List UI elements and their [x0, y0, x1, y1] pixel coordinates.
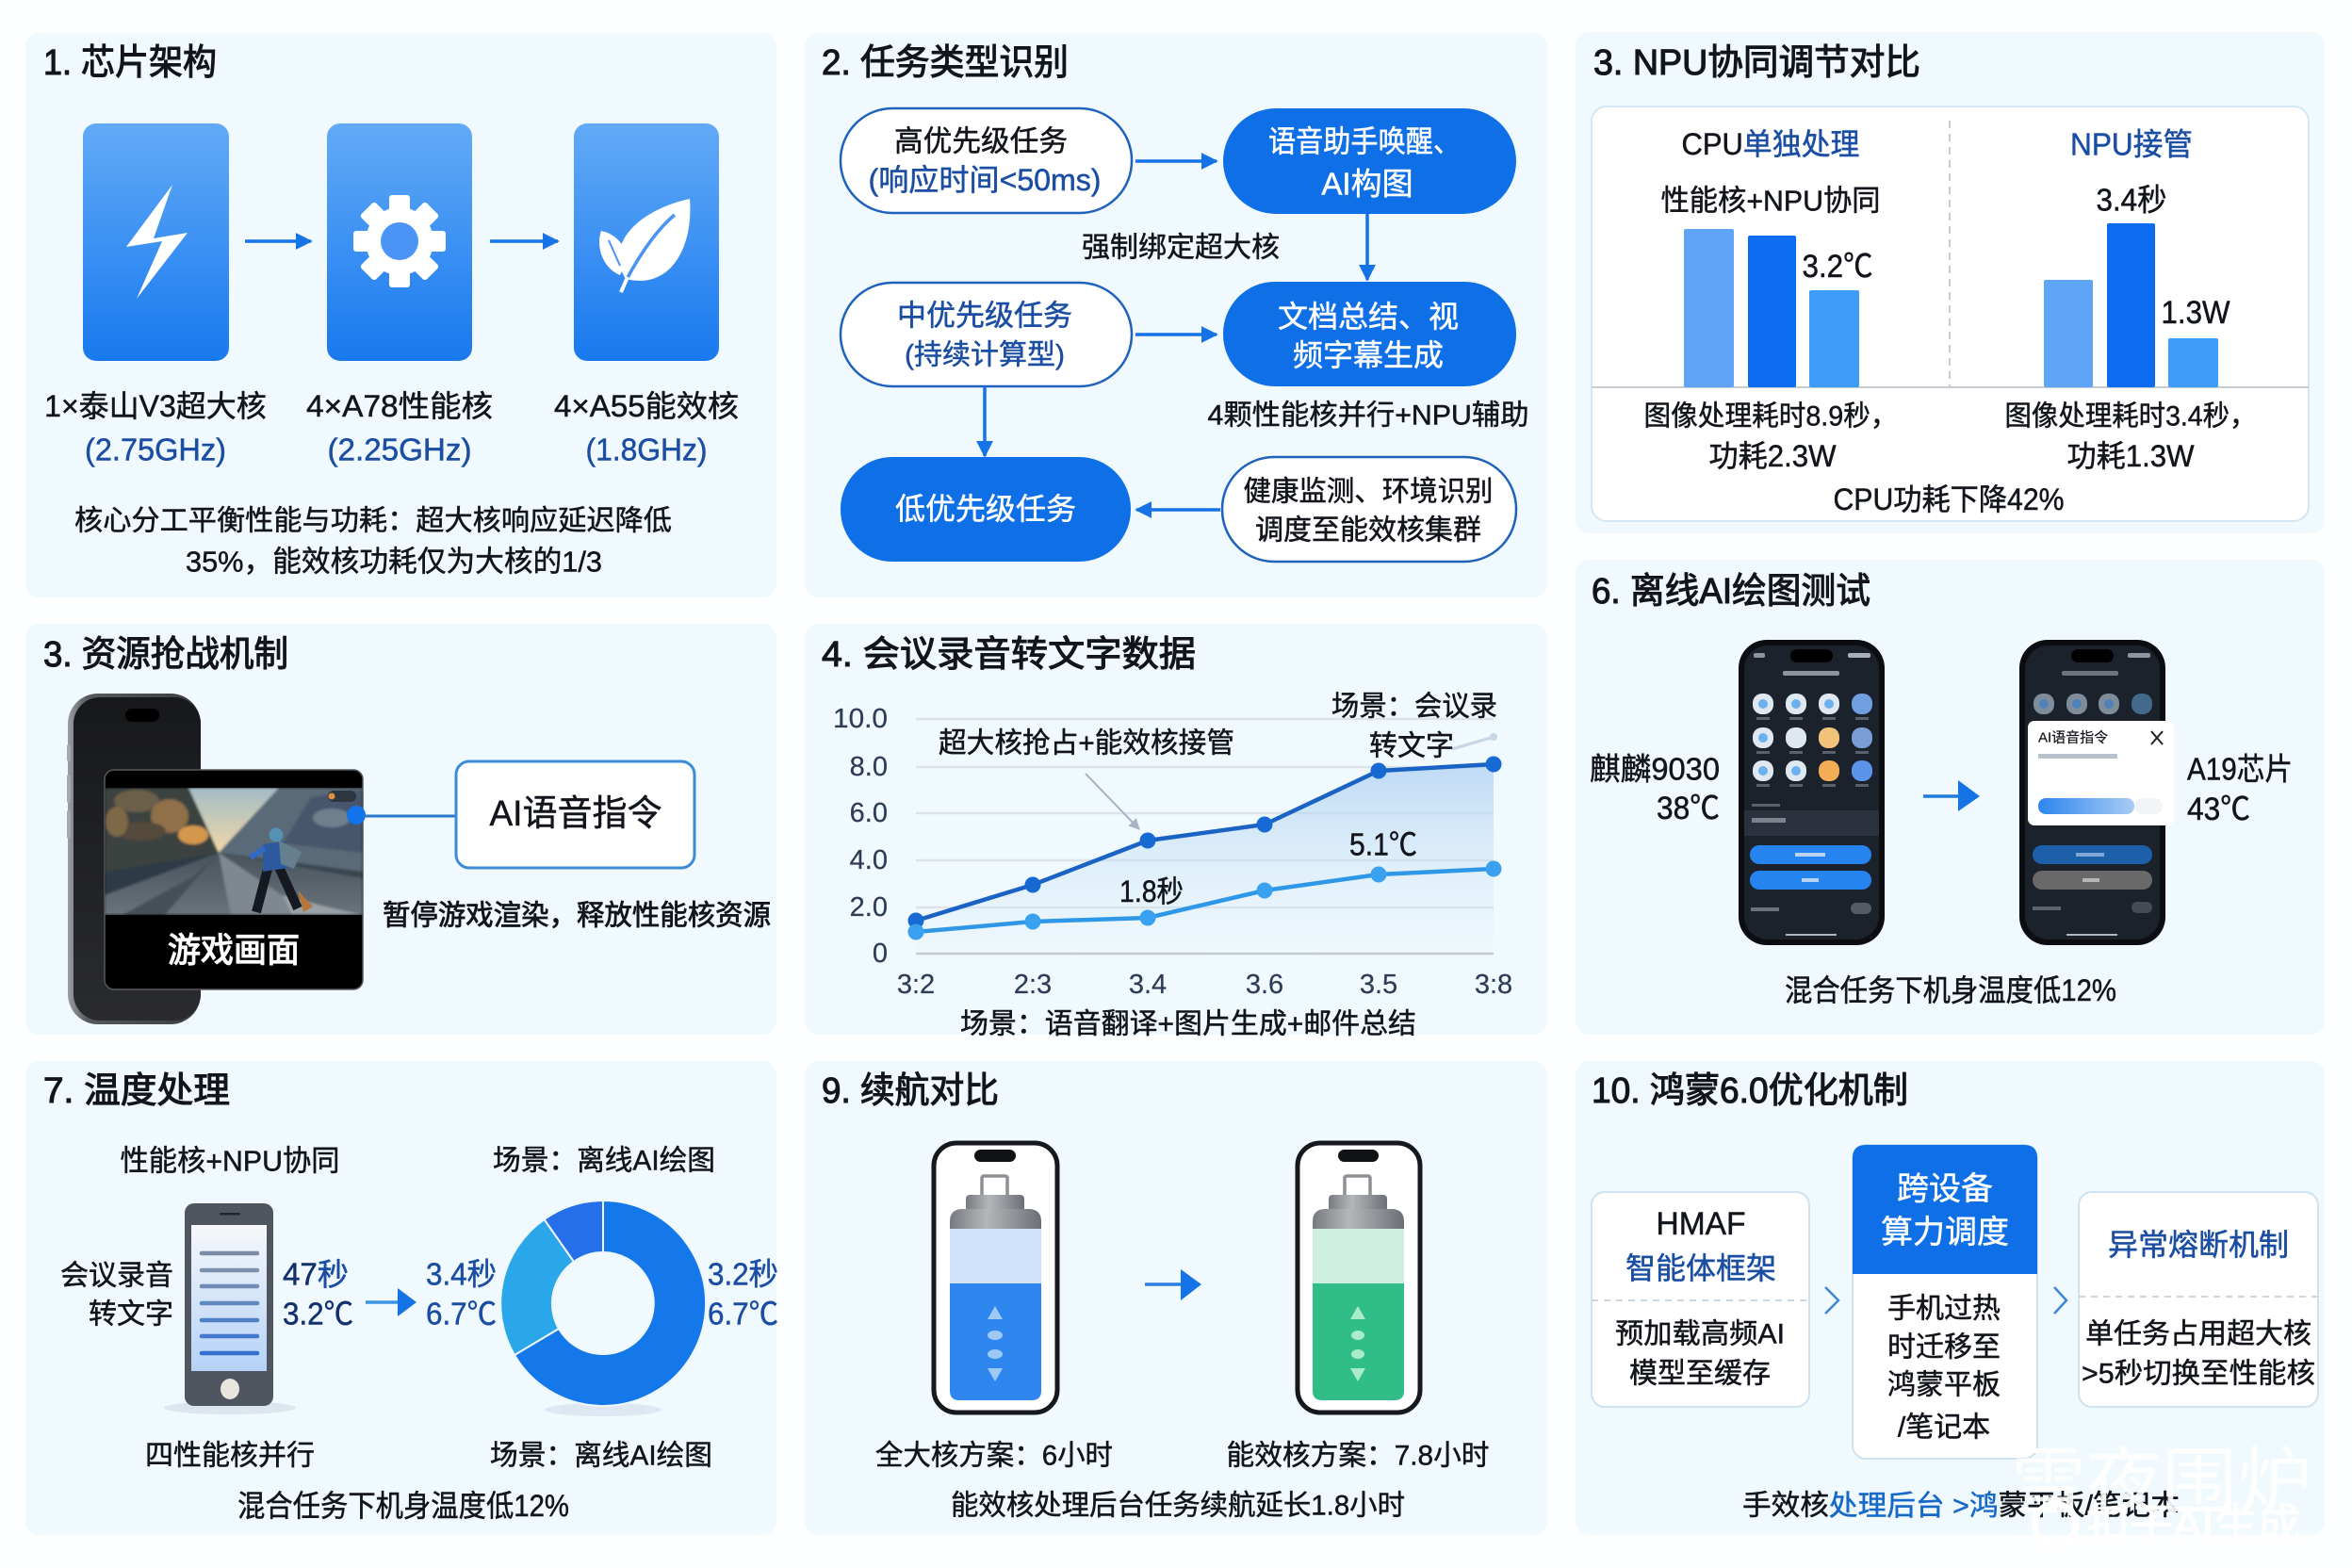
pill: high priority: (响应时间<50ms) [869, 163, 1101, 197]
pill: document summary: 文档总结、视 [1278, 300, 1459, 334]
y axis labels: 10.0 [833, 704, 888, 734]
card: fuse: 异常熔断机制 [2108, 1228, 2289, 1262]
heading: CPU only: CPU单独处理 [1681, 127, 1860, 161]
pill: high priority: 高优先级任务 [894, 124, 1068, 158]
donut chart [500, 1200, 706, 1416]
dark series [908, 756, 1502, 929]
card: HMAF: 模型至缓存 [1629, 1359, 1771, 1389]
line chart [833, 692, 1512, 1000]
heading: HarmonyOS optimisation: 10. 鸿蒙6.0优化机制 [1592, 1071, 1908, 1111]
watermark: 扣子AI生成 [2086, 1500, 2300, 1549]
arrow: super to performance [245, 239, 311, 243]
label: scenario top: 场景：离线AI绘图 [493, 1146, 715, 1176]
bars: CPU group [1684, 229, 1859, 387]
text: pause render: 暂停游戏渲染，释放性能核资源 [383, 901, 771, 931]
label: Kirin 9030: 麒麟9030 [1590, 752, 1720, 786]
x axis labels: 2:3 [1014, 970, 1052, 1000]
caption: task migration: 手效核处理后台 >鸿蒙平板/笔记本 [1742, 1491, 2180, 1521]
label: A19 chip [2187, 752, 2293, 827]
x axis labels: 3.5 [1360, 970, 1397, 1000]
text: core division summary: 35%，能效核功耗仅为大核的1/3 [186, 545, 602, 579]
chevron 2 [2054, 1287, 2066, 1314]
label: parallel cores: 4颗性能核并行+NPU辅助 [1208, 400, 1528, 432]
label: efficiency core plan: 能效核方案：7.8小时 [1227, 1440, 1489, 1472]
card: HMAF: 智能体框架 [1625, 1251, 1776, 1285]
pill: low priority: 低优先级任务 [895, 492, 1076, 526]
light series [908, 861, 1502, 940]
label: performance core: 4×A78性能核 [306, 389, 493, 423]
value: 1.3 W: 1.3W [2162, 295, 2230, 331]
text: NPU result: 功耗1.3W [2067, 439, 2195, 473]
phone icon with text lines [164, 1203, 296, 1414]
text: power drop: CPU功耗下降42% [1834, 482, 2064, 516]
watermark: 雪夜围炉 [2011, 1442, 2312, 1525]
arrow: high to voice [1135, 159, 1217, 163]
values: 47 s 3.2 degrees [283, 1257, 353, 1331]
label: efficiency core [554, 389, 739, 467]
value: 3.4 seconds: 3.4秒 [2096, 183, 2167, 217]
value: 1.8 seconds: 1.8秒 [1119, 874, 1184, 908]
phone with game overlay [67, 694, 366, 1024]
card: HMAF: HMAF [1657, 1206, 1745, 1242]
card: fuse: >5秒切换至性能核 [2082, 1359, 2315, 1389]
label: super core [44, 389, 267, 467]
phone: blue battery [934, 1143, 1057, 1413]
arrow: phone compare [1923, 780, 1980, 811]
heading: NPU comparison: 3. NPU协同调节对比 [1593, 43, 1920, 83]
box: AI voice command: AI语音指令 [490, 794, 662, 834]
chevron 1 [1825, 1287, 1838, 1314]
bars: NPU group [2044, 223, 2218, 387]
phone: left app grid [1739, 640, 1885, 945]
label: efficiency core: (1.8GHz) [586, 432, 707, 467]
text: CPU result: 功耗2.3W [1709, 439, 1837, 473]
card: super core with lightning icon [83, 123, 229, 361]
label: scenario bottom: 场景：离线AI绘图 [490, 1440, 712, 1472]
panel: 9. battery life [805, 1061, 1547, 1535]
pill: voice assistant: AI构图 [1321, 166, 1413, 202]
values: left of donut: 6.7℃ [426, 1297, 497, 1331]
text: CPU result: 图像处理耗时8.9秒， [1643, 401, 1898, 432]
x axis labels [897, 970, 1512, 1000]
card: efficiency core with leaf icon [574, 123, 719, 361]
y axis labels: 8.0 [850, 752, 888, 782]
card: fuse [2079, 1192, 2318, 1407]
card: comparison [1592, 106, 2309, 521]
label: all big core plan: 全大核方案：6小时 [875, 1440, 1113, 1472]
faint series [1452, 733, 1497, 749]
card: cross-device [1853, 1145, 2037, 1459]
label: performance core: (2.25GHz) [328, 432, 471, 467]
caption: battery extension: 能效核处理后台任务续航延长1.8小时 [951, 1491, 1405, 1521]
value: 5.1 degrees: 5.1℃ [1349, 827, 1417, 861]
text: CPU result [1643, 401, 1898, 473]
label: A19 chip: A19芯片 [2187, 752, 2293, 786]
x axis labels: 3:2 [897, 970, 935, 1000]
pill: health monitoring: 调度至能效核集群 [1255, 514, 1481, 547]
values: left of donut [426, 1257, 497, 1331]
arrow: voice to docs [1365, 214, 1369, 280]
panel: 4. transcription data [805, 624, 1547, 1040]
panel: 7. temperature [25, 1061, 778, 1535]
game screen [105, 770, 363, 989]
panel: 3. NPU comparison [1576, 32, 2325, 533]
text: NPU result: 图像处理耗时3.4秒， [2005, 401, 2256, 432]
label: super core: (2.75GHz) [85, 432, 226, 467]
label: bind to super core: 强制绑定超大核 [1082, 232, 1280, 264]
arrow: medium to low [983, 386, 987, 456]
x axis labels: 3.4 [1129, 970, 1167, 1000]
panel: 10. HarmonyOS optimisation [1576, 1061, 2325, 1549]
heading: temperature: 7. 温度处理 [43, 1071, 230, 1111]
heading: task type recognition: 2. 任务类型识别 [822, 43, 1069, 83]
pill: medium priority [841, 283, 1132, 386]
values: right of donut: 3.2秒 [708, 1257, 778, 1291]
card: cross-device: 手机过热 [1887, 1293, 2001, 1325]
y axis labels: 4.0 [850, 845, 888, 875]
card: fuse: 单任务占用超大核 [2085, 1319, 2311, 1349]
panel: 1. chip architecture [25, 33, 776, 597]
label: four perf cores: 四性能核并行 [145, 1440, 315, 1472]
values: left of donut: 3.4秒 [426, 1257, 497, 1291]
y axis labels [833, 704, 888, 969]
panel: 2. task type recognition [805, 33, 1547, 597]
caption: scenario: 场景：语音翻译+图片生成+邮件总结 [960, 1008, 1416, 1040]
box: AI voice command [456, 761, 694, 868]
card: cross-device: /笔记本 [1898, 1412, 1990, 1444]
pill: document summary: 频字幕生成 [1293, 338, 1444, 372]
panel: 6. offline AI drawing [1576, 560, 2325, 1035]
label: Kirin 9030: 38℃ [1657, 791, 1720, 826]
card: HMAF [1592, 1192, 1809, 1407]
connector line [364, 814, 456, 818]
pill: high priority [841, 108, 1132, 213]
pill: voice assistant [1223, 108, 1516, 214]
y axis labels: 6.0 [850, 798, 888, 828]
arrow: temp compare [366, 1288, 416, 1316]
arrow: performance to efficiency [490, 239, 558, 243]
label: efficiency core: 4×A55能效核 [554, 389, 739, 423]
pill: health monitoring [1222, 457, 1516, 562]
popup dialog [2028, 721, 2174, 825]
y axis labels: 2.0 [850, 892, 888, 923]
card: performance core with gear icon [327, 123, 472, 361]
y axis labels: 0 [873, 939, 888, 969]
annotation: core takeover: 超大核抢占+能效核接管 [939, 727, 1234, 760]
value: 3.2 degrees: 3.2℃ [1802, 249, 1873, 285]
area fill [916, 764, 1494, 954]
card: cross-device: 鸿蒙平板 [1887, 1370, 2001, 1400]
label: meeting transcription: 转文字 [89, 1298, 173, 1331]
pill: voice assistant: 语音助手唤醒、 [1268, 124, 1461, 158]
pill: health monitoring: 健康监测、环境识别 [1244, 477, 1493, 507]
annotation: scenario: 场景：会议录 [1331, 692, 1497, 722]
caption: temperature: 混合任务下机身温度低12% [1785, 973, 2116, 1007]
x axis labels: 3:8 [1475, 970, 1512, 1000]
pill: low priority [841, 457, 1131, 562]
card: cross-device: 时迁移至 [1887, 1332, 2001, 1363]
label: A19 chip: 43℃ [2187, 792, 2250, 827]
label: super core: 1×泰山V3超大核 [44, 389, 267, 423]
arrow: health to low [1136, 508, 1220, 512]
text: core division summary: 核心分工平衡性能与功耗：超大核响应延迟降低 [74, 505, 672, 537]
heading: transcription data: 4. 会议录音转文字数据 [822, 635, 1196, 675]
pill: document summary [1223, 282, 1516, 386]
label: perf plus NPU: 性能核+NPU协同 [1660, 185, 1881, 217]
heading: NPU takeover: NPU接管 [2070, 126, 2193, 162]
annotation: scenario: 转文字 [1369, 731, 1454, 761]
heading: battery life: 9. 续航对比 [822, 1071, 999, 1111]
text: core division summary [74, 505, 672, 579]
card: cross-device: 算力调度 [1881, 1215, 2009, 1250]
arrow: medium to docs [1135, 333, 1217, 336]
label: performance core [306, 389, 493, 467]
values: right of donut: 6.7℃ [708, 1297, 778, 1331]
x axis labels: 3.6 [1246, 970, 1283, 1000]
annotation: scenario [1331, 692, 1497, 761]
label: perf plus NPU: 性能核+NPU协同 [121, 1144, 339, 1178]
card: HMAF: 预加载高频AI [1615, 1319, 1785, 1349]
label: meeting transcription [60, 1261, 173, 1331]
pill: medium priority: (持续计算型) [905, 339, 1065, 371]
arrow: battery compare [1145, 1269, 1201, 1300]
heading: resource contention: 3. 资源抢战机制 [43, 635, 288, 675]
values: right of donut [708, 1257, 778, 1331]
phone: right with popup [2019, 640, 2174, 945]
dot: connector [347, 806, 366, 825]
label: Kirin 9030 [1590, 752, 1720, 826]
heading: chip architecture: 1. 芯片架构 [43, 43, 217, 83]
label: game screen: 游戏画面 [168, 931, 300, 969]
annotation arrow [1086, 774, 1139, 829]
values: 47 s 3.2 degrees: 3.2℃ [283, 1297, 353, 1331]
text: NPU result [2005, 401, 2256, 473]
card: cross-device: 跨设备 [1897, 1171, 1993, 1207]
phone: green battery [1298, 1143, 1420, 1413]
popup dialog: AI语音指令 [2038, 729, 2108, 746]
caption: temperature: 混合任务下机身温度低12% [237, 1489, 569, 1523]
pill: medium priority: 中优先级任务 [897, 300, 1072, 332]
heading: offline AI drawing: 6. 离线AI绘图测试 [1592, 572, 1870, 612]
values: 47 s 3.2 degrees: 47秒 [283, 1257, 349, 1291]
panel: 3. resource contention [25, 624, 776, 1035]
label: meeting transcription: 会议录音 [60, 1261, 173, 1291]
